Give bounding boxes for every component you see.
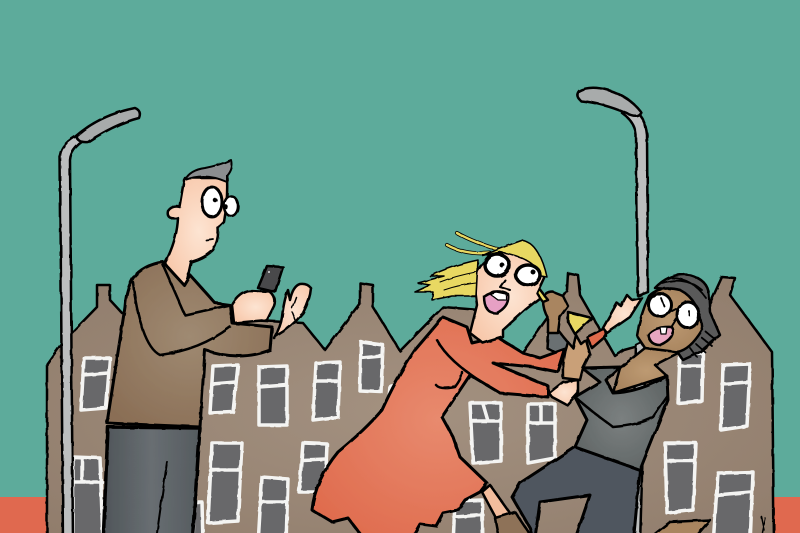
grey person face — [637, 288, 702, 352]
grey person hair back — [655, 275, 720, 360]
woman far hand — [603, 295, 642, 333]
woman shoe — [495, 512, 537, 533]
man eyes — [202, 187, 222, 217]
house windows — [73, 342, 753, 533]
woman neck and face — [470, 250, 544, 343]
grey person trousers — [512, 447, 640, 533]
artist signature — [761, 516, 765, 532]
woman nose — [500, 280, 510, 290]
person in grey being pulled by the hair — [512, 275, 720, 533]
woman hair strands yellow — [447, 233, 500, 253]
right lamp head — [577, 88, 641, 116]
grey person wrist and hand pulling hair — [543, 292, 568, 333]
left lamp pole — [60, 130, 92, 533]
background: orange ground strip — [0, 497, 800, 533]
grey person neck — [613, 348, 680, 393]
woman in orange dress — [312, 233, 642, 533]
grey person eyes — [648, 294, 672, 316]
man trousers — [103, 427, 200, 533]
woman mouth — [484, 291, 508, 313]
man filming with phone — [103, 160, 311, 533]
woman far sleeve — [587, 328, 606, 348]
left lamp head — [76, 108, 140, 142]
woman dress — [312, 317, 565, 533]
grey person hand pushing woman — [563, 335, 590, 380]
woman eyes — [485, 254, 509, 276]
left street lamp — [60, 108, 140, 533]
foot at bottom right — [647, 520, 710, 533]
grey person mouth — [648, 327, 673, 345]
woman hair strands outline — [447, 233, 500, 253]
man hair — [185, 160, 232, 182]
right lamp pole — [622, 105, 648, 296]
right street lamp — [577, 88, 648, 533]
grey person raised arm sleeve — [547, 330, 570, 356]
grey person sweater — [575, 367, 668, 470]
man neck and head — [165, 178, 227, 285]
man mouth — [206, 239, 213, 240]
man raised left hand — [274, 284, 311, 338]
woman hair cap — [483, 240, 547, 277]
man right hand holding phone — [232, 291, 275, 323]
man sweater — [107, 262, 272, 427]
woman leg — [482, 485, 510, 520]
woman hair body — [415, 260, 478, 300]
woman ponytail held — [535, 287, 548, 302]
woman near hand — [549, 380, 578, 405]
row of canal houses — [47, 273, 774, 533]
woman hair — [415, 233, 547, 300]
phone — [258, 266, 283, 292]
